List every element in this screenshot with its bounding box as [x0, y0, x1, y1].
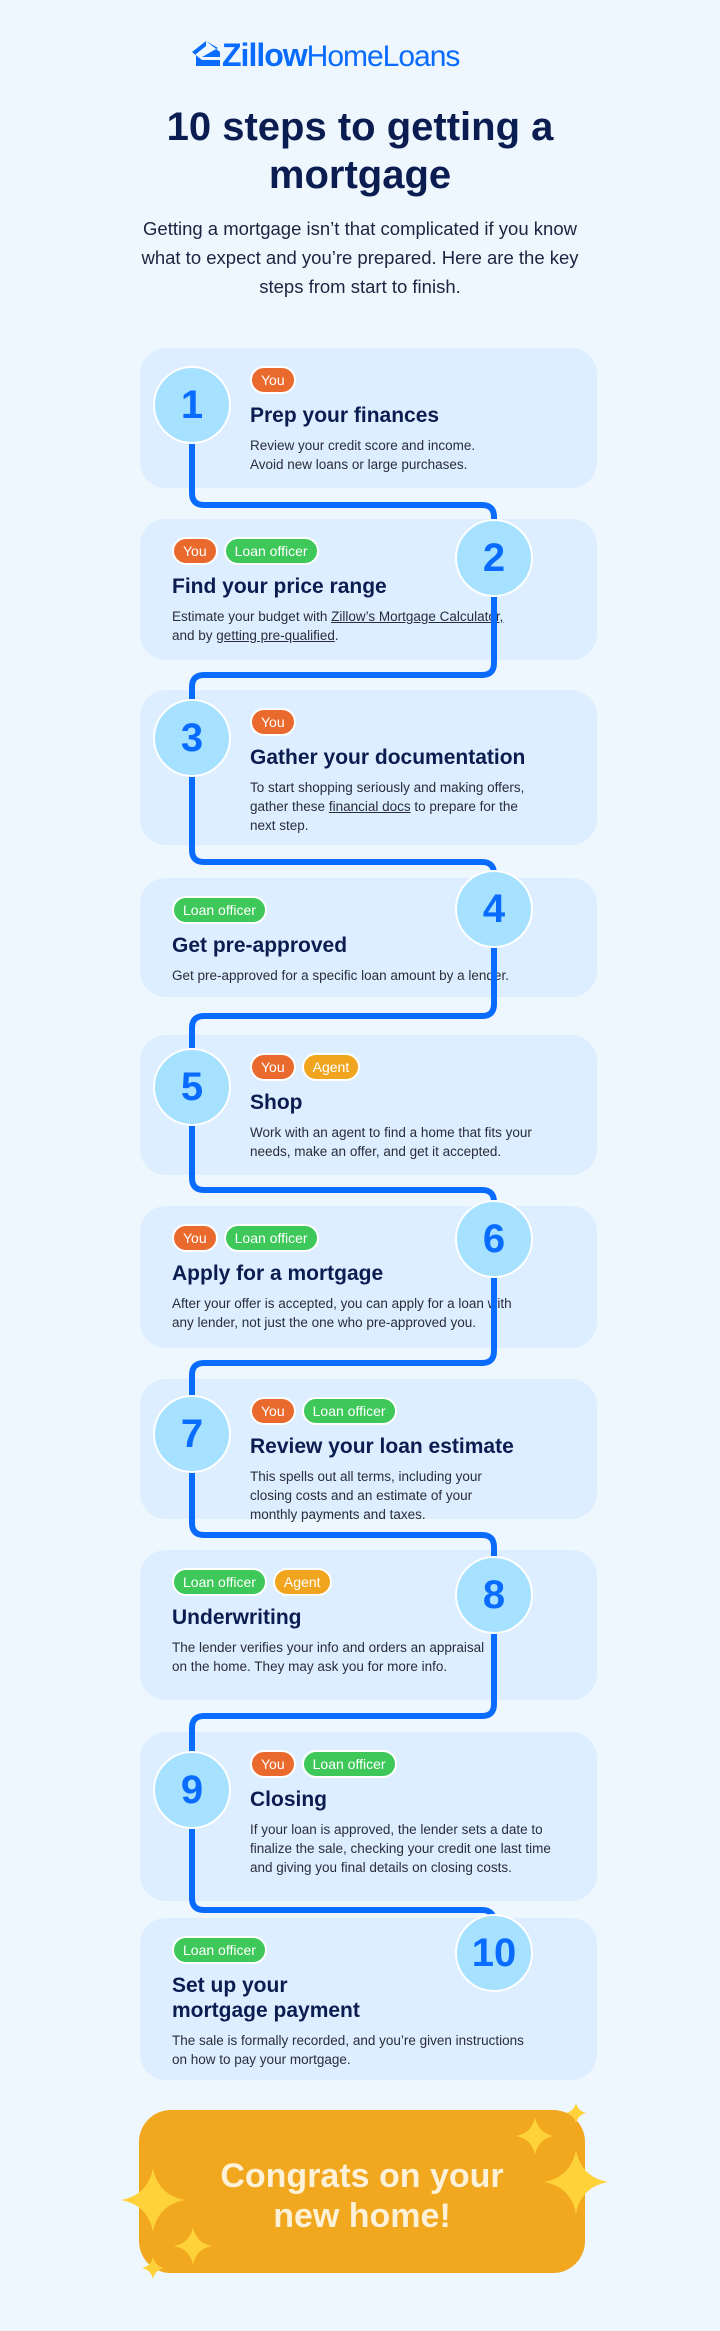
card 2: Loan officer — [235, 543, 308, 559]
card 8: Underwriting — [172, 1606, 302, 1629]
card 2: Find your price range — [172, 575, 387, 598]
card 10 — [140, 1918, 597, 2080]
card 9: You — [261, 1756, 285, 1772]
card 5: Work with an agent to find a home that fits your — [250, 1125, 532, 1140]
card 9: and giving you final details on closing costs. — [250, 1860, 512, 1875]
circle 8: 8 — [483, 1573, 505, 1617]
subtitle: what to expect and you’re prepared. Here are the key — [141, 247, 579, 268]
card 3: next step. — [250, 818, 309, 833]
card 3: Gather your documentation — [250, 746, 525, 769]
circle 7 — [153, 1395, 231, 1473]
card 7: This spells out all terms, including your — [250, 1469, 482, 1484]
card 6: You — [183, 1230, 207, 1246]
card 4 — [140, 878, 597, 997]
card 2 — [140, 519, 597, 660]
card 10: The sale is formally recorded, and you’re given instructions — [172, 2033, 524, 2048]
congrats box: Congrats on your — [220, 2157, 504, 2195]
circle 10: 10 — [472, 1931, 516, 1975]
card 8: The lender verifies your info and orders an appraisal — [172, 1640, 484, 1655]
circle 4: 4 — [483, 887, 505, 931]
card 8 — [140, 1550, 597, 1700]
card 10: mortgage payment — [172, 1999, 360, 2022]
card 9: Closing — [250, 1788, 327, 1811]
card 7 — [140, 1379, 597, 1519]
card 4: Loan officer — [183, 902, 256, 918]
circle 4 — [455, 870, 533, 948]
circle 6: 6 — [483, 1217, 505, 1261]
circle 9: 9 — [181, 1768, 203, 1812]
card 10: on how to pay your mortgage. — [172, 2052, 351, 2067]
card 1: Review your credit score and income. — [250, 438, 475, 453]
card 2: and by getting pre-qualified. — [172, 628, 339, 643]
card 7: monthly payments and taxes. — [250, 1507, 426, 1522]
card 1: Avoid new loans or large purchases. — [250, 457, 467, 472]
circle 7: 7 — [181, 1412, 203, 1456]
subtitle: steps from start to finish. — [259, 276, 461, 297]
circle 3 — [153, 699, 231, 777]
circle 8 — [455, 1556, 533, 1634]
card 8: Agent — [284, 1574, 320, 1590]
card 5: needs, make an offer, and get it accepted. — [250, 1144, 501, 1159]
circle 1 — [153, 366, 231, 444]
card 8: on the home. They may ask you for more info. — [172, 1659, 447, 1674]
card 9 — [140, 1732, 597, 1901]
card 3: To start shopping seriously and making offers, — [250, 780, 524, 795]
card 6: Apply for a mortgage — [172, 1262, 383, 1285]
card 5: Shop — [250, 1091, 302, 1114]
circle 2: 2 — [483, 536, 505, 580]
card 7: You — [261, 1403, 285, 1419]
circle 3: 3 — [181, 716, 203, 760]
icon: zillow house — [192, 41, 220, 66]
card 6 — [140, 1206, 597, 1348]
card 8: Loan officer — [183, 1574, 256, 1590]
congrats box — [139, 2110, 585, 2273]
title — [167, 105, 554, 197]
card 9: If your loan is approved, the lender sets a date to — [250, 1822, 543, 1837]
card 1 — [140, 348, 597, 488]
circle 5: 5 — [181, 1065, 203, 1109]
card 5: You — [261, 1059, 285, 1075]
card 10: Loan officer — [183, 1942, 256, 1958]
card 2: You — [183, 543, 207, 559]
card 9: Loan officer — [313, 1756, 386, 1772]
card 4: Get pre-approved for a specific loan amount by a lender. — [172, 968, 509, 983]
circle 6 — [455, 1200, 533, 1278]
card 4: Get pre-approved — [172, 934, 347, 957]
card 3: gather these financial docs to prepare for the — [250, 799, 518, 814]
circle 10 — [455, 1914, 533, 1992]
circle 2 — [455, 519, 533, 597]
card 2: Estimate your budget with Zillow’s Mortgage Calculator, — [172, 609, 503, 624]
card 10: Set up your — [172, 1974, 288, 1997]
card 6: Loan officer — [235, 1230, 308, 1246]
card 1: You — [261, 372, 285, 388]
subtitle: Getting a mortgage isn’t that complicated if you know — [143, 218, 577, 239]
circle 1: 1 — [181, 383, 203, 427]
card 7: Review your loan estimate — [250, 1435, 514, 1458]
card 7: closing costs and an estimate of your — [250, 1488, 472, 1503]
card 5: Agent — [313, 1059, 349, 1075]
congrats box: new home! — [273, 2197, 451, 2235]
card 6: any lender, not just the one who pre-approved you. — [172, 1315, 476, 1330]
title: mortgage — [269, 153, 451, 197]
card 1: Prep your finances — [250, 404, 439, 427]
card 7: Loan officer — [313, 1403, 386, 1419]
card 9: finalize the sale, checking your credit one last time — [250, 1841, 551, 1856]
logo: ZillowHomeLoans — [222, 37, 459, 73]
title: 10 steps to getting a — [167, 105, 553, 149]
circle 9 — [153, 1751, 231, 1829]
subtitle — [141, 218, 579, 297]
card 3 — [140, 690, 597, 845]
card 3: You — [261, 714, 285, 730]
card 6: After your offer is accepted, you can apply for a loan with — [172, 1296, 512, 1311]
card 5 — [140, 1035, 597, 1175]
circle 5 — [153, 1048, 231, 1126]
